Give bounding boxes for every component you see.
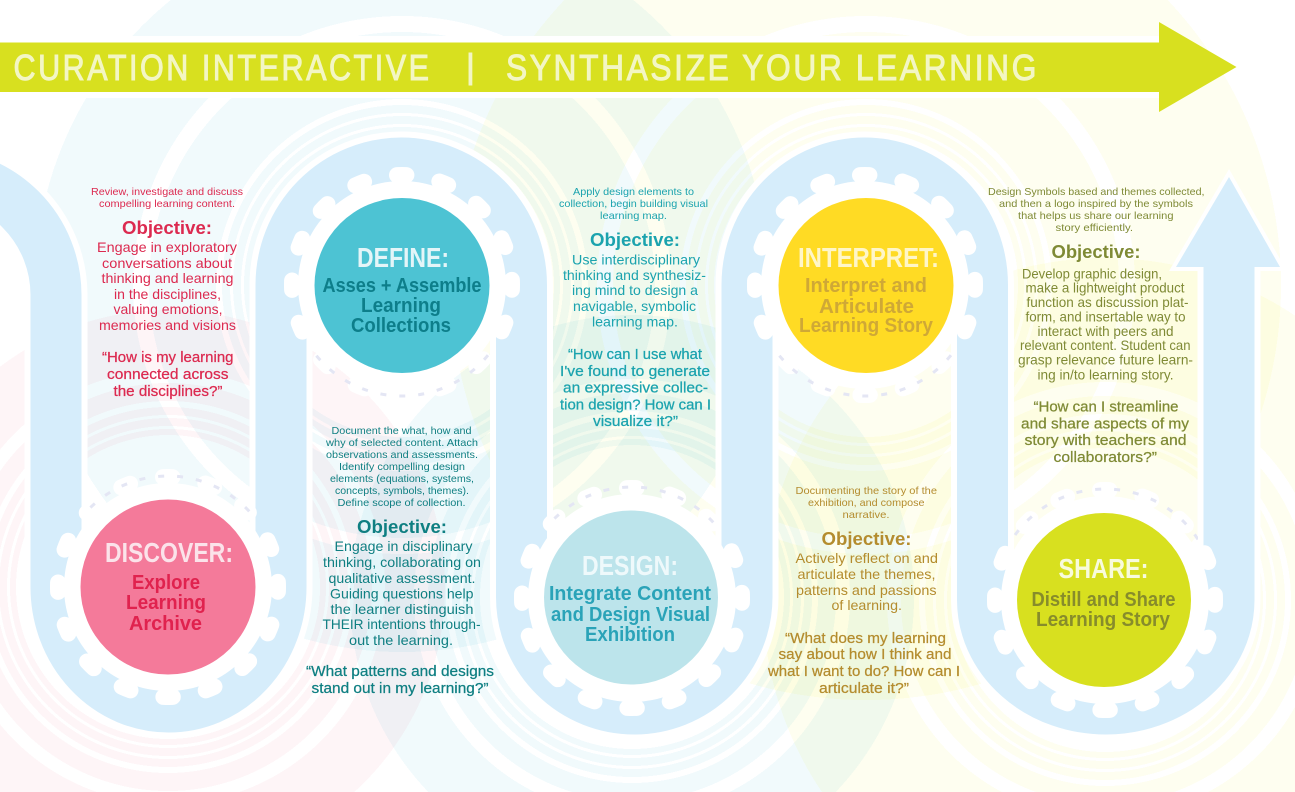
text block: share [988,186,1204,466]
text block: design [559,186,711,430]
subheading: integrate content [549,583,711,646]
design objective body: ing mind to design a [572,282,698,298]
subheading: explore learning archive: Explore [132,572,200,594]
gear: share [994,489,1216,711]
share objective body: interact with peers and [1038,323,1174,339]
step 1: discover [57,476,279,698]
subheading: explore learning archive: Archive [129,613,202,635]
discover description: Review, investigate and discuss [91,186,243,198]
define description: Document the what, how and [332,425,472,437]
discover guiding question: the disciplines?” [114,384,223,400]
define objective body: thinking, collaborating on [323,554,481,570]
discover guiding question: “How is my learning [102,350,234,366]
define description: concepts, symbols, themes). [335,485,469,497]
design description: Apply design elements to [573,186,694,198]
title text: | [466,48,475,86]
subheading: asses and assemble: Learning [361,295,441,317]
discover description [91,186,243,210]
define objective body: THEIR intentions through- [322,616,481,632]
title text [14,47,1039,88]
discover objective body: memories and visions [99,317,236,333]
subheading: interpret and articulate [799,275,934,337]
share description: Design Symbols based and themes collected, [988,186,1204,198]
interpret guiding question: say about how I think and [778,647,952,663]
gear: interpret [754,174,976,396]
discover objective body: thinking and learning [102,270,234,286]
subheading: integrate content: and Design Visual [551,604,710,626]
interpret objective body [796,550,938,613]
define objective heading: Objective: [357,517,447,537]
define objective body: Engage in disciplinary [334,538,472,554]
circle: share [1017,513,1191,687]
text block: define [306,425,494,697]
design guiding question: an expressive collec- [563,380,708,396]
subheading: distill and share: Distill and Share [1032,589,1176,611]
interpret objective body: of learning. [832,597,902,613]
design guiding question: visualize it?” [593,414,678,430]
subheading: interpret and articulate: Learning Story [799,315,934,337]
share guiding question: collaborators?” [1054,450,1157,466]
define description [325,425,478,509]
subheading: integrate content: Integrate Content [549,583,711,605]
gear: define [291,174,513,396]
serpentine path ribbon with up arrow [0,163,1280,709]
heading: define: DEFINE: [357,242,449,273]
subheading: asses and assemble: Asses + Assemble [322,275,482,297]
design objective body: learning map. [592,314,678,330]
define guiding question [306,664,494,697]
share objective body: form, and insertable way to [1026,308,1186,324]
step 2: define [291,174,513,396]
interpret description: Documenting the story of the [796,485,937,497]
share objective body: relevant content. Student can [1020,337,1190,353]
share description: story efficiently. [1056,222,1133,234]
subheading: integrate content: Exhibition [585,624,675,646]
share guiding question: story with teachers and [1024,433,1186,449]
design description: learning map. [600,210,667,222]
define description: Identify compelling design [339,461,465,473]
title arrow [0,22,1236,112]
interpret objective body: Actively reflect on and [796,550,938,566]
design objective body [563,252,706,330]
share objective heading: Objective: [1052,242,1140,262]
gear: discover [57,476,279,698]
discover description: compelling learning content. [99,198,235,210]
share description: and then a logo inspired by the symbols [999,198,1193,210]
share objective body [1018,266,1193,382]
subheading: distill and share [1032,589,1176,631]
circle: design [544,510,718,684]
define objective body: Guiding questions help [330,586,474,602]
define guiding question: stand out in my learning?” [312,681,489,697]
design guiding question [560,347,711,430]
interpret objective body: articulate the themes, [798,566,936,582]
interpret guiding question: “What does my learning [785,631,946,647]
discover objective body: Engage in exploratory [97,239,237,255]
gear: design [521,487,743,709]
share guiding question [1021,400,1190,466]
interpret objective heading: Objective: [822,529,912,549]
define objective body: out the learning. [349,632,453,648]
discover guiding question [102,350,234,400]
design description: collection, begin building visual [559,198,708,210]
step 5: share [994,489,1216,711]
text block: interpret [767,485,960,697]
text block: discover [91,186,243,400]
discover guiding question: connected across [107,367,228,383]
interpret description: exhibition, and compose [808,497,925,509]
share description [988,186,1204,234]
design objective heading: Objective: [590,230,680,250]
discover objective body: conversations about [102,255,232,271]
define description: observations and assessments. [326,449,478,461]
define description: Define scope of collection. [338,497,466,509]
design guiding question: I've found to generate [560,364,710,380]
share description: that helps us share our learning [1018,210,1174,222]
share objective body: make a lightweight product [1026,280,1185,296]
share guiding question: and share aspects of my [1021,416,1190,432]
define guiding question: “What patterns and designs [306,664,494,680]
heading: design: DESIGN: [582,550,678,581]
interpret guiding question: what I want to do? How can I [767,664,960,680]
heading: discover: DISCOVER: [105,537,233,568]
design guiding question: tion design? How can I [560,398,711,414]
discover objective body: valuing emotions, [114,301,222,317]
design guiding question: “How can I use what [568,347,702,363]
step 4: interpret [754,174,976,396]
heading: share: SHARE: [1058,553,1148,584]
subheading: interpret and articulate: Interpret and [805,275,927,297]
design objective body: navigable, symbolic [573,298,696,314]
subheading: asses and assemble: Collections [351,315,451,337]
circle: define [314,198,490,373]
define objective body [322,538,481,648]
design description [559,186,708,222]
interpret guiding question [767,631,960,697]
interpret guiding question: articulate it?” [819,681,909,697]
define description: elements (equations, systems, [330,473,474,485]
share objective body: Develop graphic design, [1022,266,1162,282]
circle: interpret [778,198,954,373]
subheading: explore learning archive [126,572,206,635]
subheading: asses and assemble [322,275,482,337]
discover objective heading: Objective: [122,218,212,238]
interpret description [796,485,937,521]
step 3: design [521,487,743,709]
subheading: distill and share: Learning Story [1036,609,1171,631]
share objective body: grasp relevance future learn- [1018,352,1193,368]
subheading: explore learning archive: Learning [126,592,206,614]
circle: discover [80,500,256,674]
subheading: interpret and articulate: Articulate [819,296,914,318]
title text: SYNTHASIZE YOUR LEARNING [506,47,1039,88]
share objective body: ing in/to learning story. [1038,366,1174,382]
define description: why of selected content. Attach [325,437,478,449]
share objective body: function as discussion plat- [1026,294,1189,310]
define objective body: the learner distinguish [330,601,474,617]
design objective body: Use interdisciplinary [572,252,700,268]
discover objective body: in the disciplines, [114,286,221,302]
title text: CURATION INTERACTIVE [14,47,432,88]
share guiding question: “How can I streamline [1034,400,1178,416]
heading: interpret: INTERPRET: [798,242,939,273]
define objective body: qualitative assessment. [328,570,476,586]
interpret objective body: patterns and passions [796,582,936,598]
discover objective body [97,239,237,333]
design objective body: thinking and synthesiz- [563,267,706,283]
interpret description: narrative. [842,509,890,521]
